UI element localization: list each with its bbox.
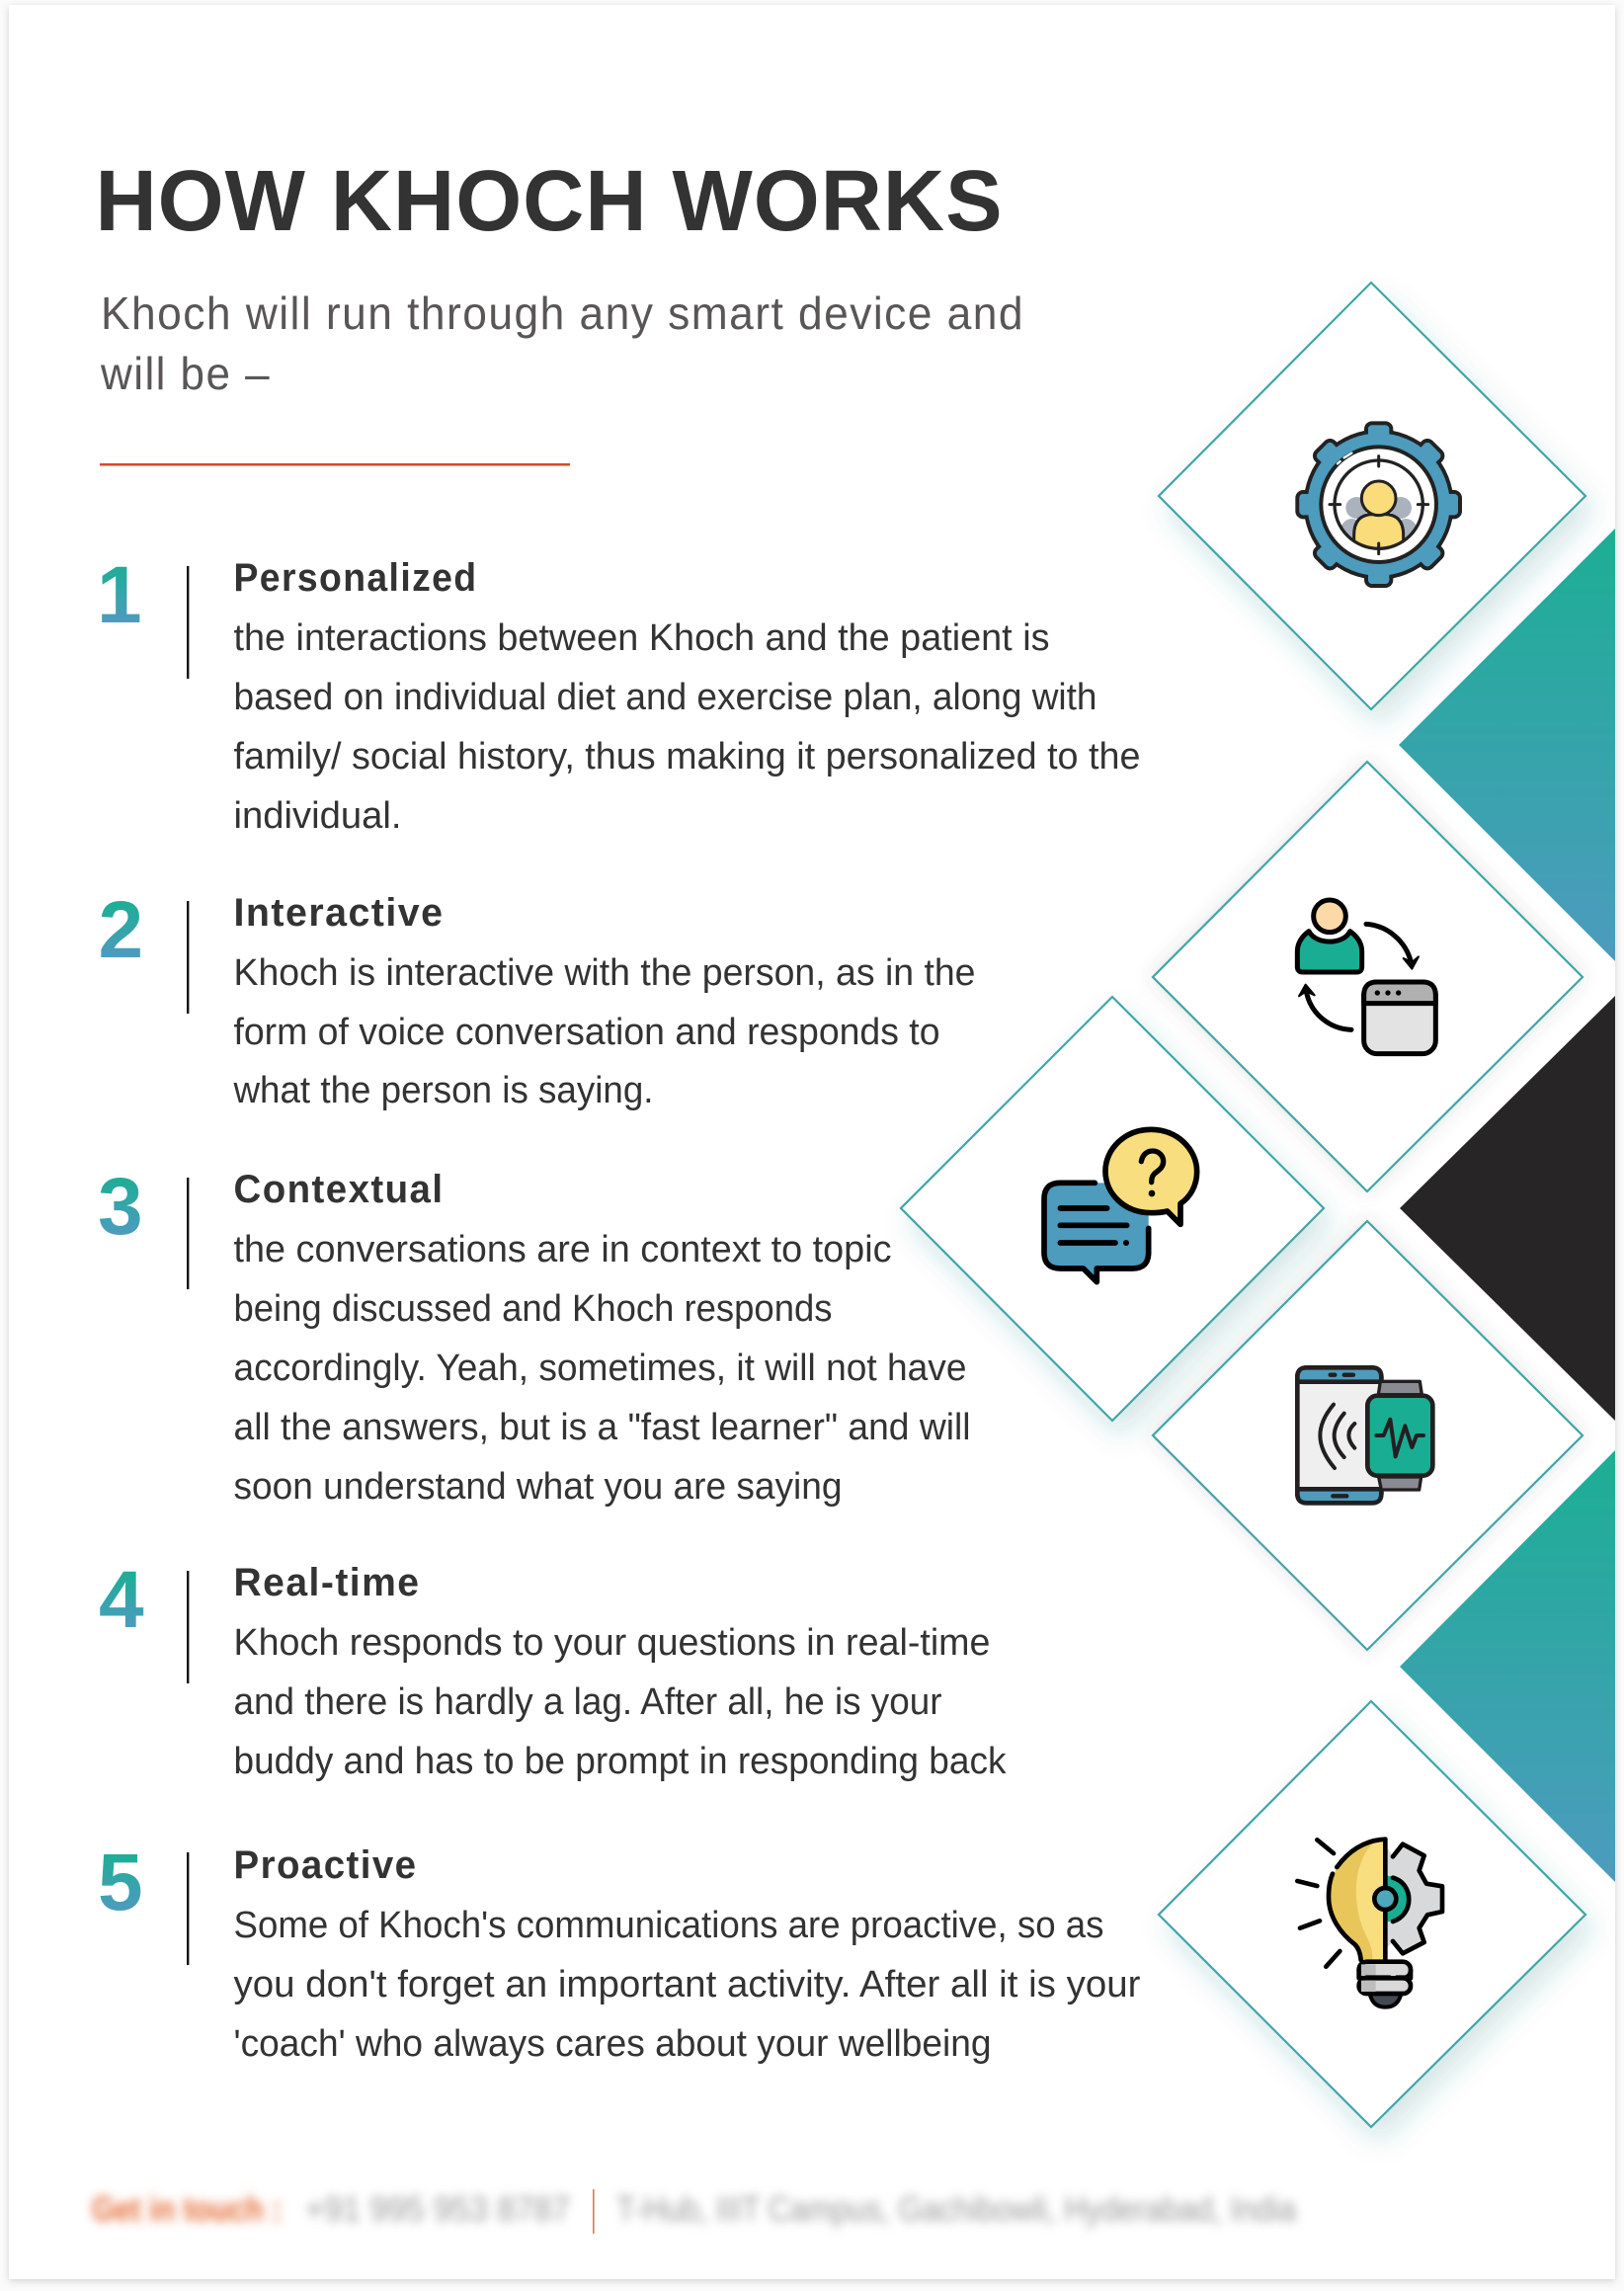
body text 3: all the answers, but is a "fast learner" and will	[233, 1407, 970, 1448]
body text 3	[233, 1229, 970, 1508]
list item 4: Real-time	[99, 1555, 1007, 1782]
icon: chat bubbles with question mark	[1044, 1129, 1197, 1282]
subtitle: Khoch will run through any smart device and	[101, 287, 1024, 339]
separator line 1	[187, 566, 189, 679]
diamond 5 frame	[1159, 1701, 1585, 2127]
body text 1: the interactions between Khoch and the patient is	[233, 617, 1049, 659]
body text 4	[233, 1622, 1007, 1782]
body text 5: 'coach' who always cares about your wellbeing	[233, 2023, 992, 2065]
icon: gear with targeted person	[1297, 423, 1460, 586]
separator line 3	[187, 1178, 189, 1289]
right side decorative triangle: teal top	[1399, 529, 1615, 961]
number 3: 3	[98, 1162, 143, 1252]
separator line 4	[187, 1571, 189, 1683]
body text 5: Some of Khoch's communications are proactive, so as	[233, 1905, 1104, 1946]
heading: Interactive: Interactive	[233, 891, 445, 935]
diamond 2 frame	[1153, 762, 1583, 1191]
list item 1: Personalized	[97, 550, 1140, 837]
body text 1	[233, 617, 1140, 837]
heading: Contextual: Contextual	[233, 1168, 445, 1211]
body text 4: buddy and has to be prompt in responding back	[233, 1741, 1007, 1782]
heading: Personalized: Personalized	[233, 556, 478, 600]
diamond 1 frame	[1159, 283, 1585, 709]
diamond 4 frame	[1153, 1221, 1583, 1650]
subtitle	[100, 287, 1024, 399]
footer address: T-Hub, IIIT Campus, Gachibowli, Hyderabad, India	[616, 2190, 1296, 2229]
body text 3: being discussed and Khoch responds	[233, 1288, 832, 1330]
body text 5: you don't forget an important activity. After all it is your	[233, 1964, 1141, 2005]
body text 2	[233, 952, 975, 1111]
body text 4: Khoch responds to your questions in real-time	[233, 1622, 990, 1664]
separator line 5	[187, 1852, 189, 1965]
red divider	[100, 463, 570, 466]
icon: half light bulb half gear	[1297, 1840, 1442, 2007]
subtitle: will be –	[100, 348, 271, 399]
number 1: 1	[97, 550, 142, 640]
icon: person and screen with cycle arrows	[1297, 900, 1435, 1054]
footer separator	[593, 2189, 595, 2234]
body text 1: based on individual diet and exercise plan, along with	[233, 677, 1096, 718]
body text 1: individual.	[233, 795, 401, 837]
body text 1: family/ social history, thus making it personalized to the	[233, 736, 1140, 777]
list item 2: Interactive	[99, 885, 976, 1111]
footer phone number: +91 995 953 8787	[305, 2190, 570, 2229]
body text 3: the conversations are in context to topic	[233, 1229, 891, 1270]
list item 3: Contextual	[98, 1162, 970, 1508]
body text 2: form of voice conversation and responds to	[233, 1012, 940, 1053]
right side decorative triangle: black	[1400, 996, 1615, 1421]
body text 2: what the person is saying.	[233, 1070, 654, 1111]
body text 3: accordingly. Yeah, sometimes, it will not have	[233, 1348, 966, 1389]
diamond 3 frame	[901, 997, 1324, 1421]
separator line 2	[187, 901, 189, 1014]
heading: Real-time: Real-time	[233, 1561, 421, 1604]
body text 4: and there is hardly a lag. After all, he is your	[233, 1681, 942, 1723]
number 4: 4	[99, 1555, 144, 1645]
body text 2: Khoch is interactive with the person, as in the	[233, 952, 976, 994]
number 2: 2	[99, 885, 143, 975]
number 5: 5	[98, 1838, 143, 1927]
title: HOW KHOCH WORKS	[95, 153, 1004, 249]
footer: blurred contact line	[92, 2189, 1296, 2234]
body text 5	[233, 1905, 1141, 2065]
icon: smartphone and smartwatch	[1297, 1367, 1432, 1503]
body text 3: soon understand what you are saying	[233, 1466, 842, 1508]
footer label: get in touch: Get in touch :	[92, 2190, 282, 2229]
list item 5: Proactive	[98, 1838, 1141, 2065]
right side decorative triangle: teal bottom	[1400, 1450, 1615, 1882]
heading: Proactive: Proactive	[233, 1843, 417, 1887]
